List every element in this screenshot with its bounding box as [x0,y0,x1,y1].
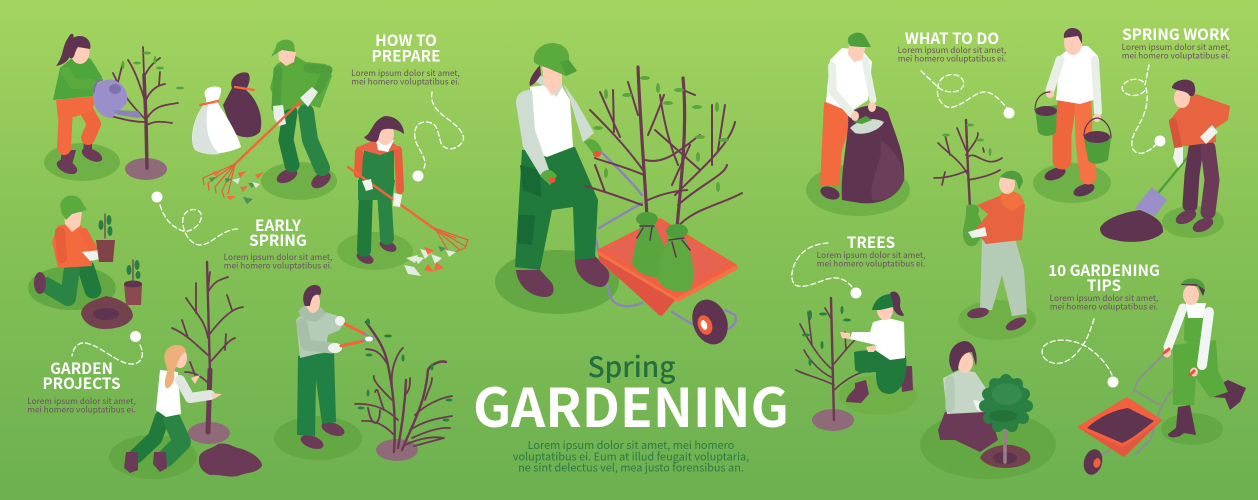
soil mound [199,443,262,477]
tree: young watered tree [110,47,184,168]
icon: soil hole [81,296,133,329]
tree: young leafy tree [796,298,870,420]
text block: spring work: mei homero voluptatibus ei. [1122,50,1230,62]
root bag left [632,222,666,277]
text block: garden projects: PROJECTS [42,372,121,394]
scene: woman raking leaves [337,116,468,276]
scene: woman watering young tree [44,34,184,181]
text block: how to prepare: mei homero voluptatibus ei. [351,76,460,88]
text block: spring work: SPRING WORK [1122,23,1230,45]
icon: garden rake [203,102,300,204]
icon: topiary [979,374,1033,432]
title: spring gardening: Spring [588,346,675,386]
scene: central woman pushing wheelbarrow with trees [495,43,742,349]
text block: trees: TREES [847,231,895,253]
soil mound [1100,210,1163,242]
text block: what to do [898,27,1006,65]
scene: man digging with shovel [1100,80,1230,242]
connector: spring work [1122,65,1166,153]
wheelbarrow tray [597,218,738,316]
tree: tall bare tree [172,262,243,432]
text block: 10 gardening tips: TIPS [1087,274,1121,296]
icon: pruned bush [355,318,452,452]
text block: garden projects [27,357,136,416]
scene: person in orange hoodie carrying tree [934,120,1036,340]
tree: sapling with root bag [934,120,1002,246]
icon: white garden bag [192,86,241,154]
text block: early spring: SPRING [249,229,307,251]
connector: 10 gardening tips [1042,319,1118,388]
icon: bucket left [1035,92,1057,136]
icon: watering can [93,80,142,118]
scene: blonde woman kneeling by tree [109,262,262,479]
root bag right [657,236,693,292]
text block: 10 gardening tips: Lorem ipsum dolor sit amet, [1050,292,1158,304]
text block: early spring: Lorem ipsum dolor sit amet, [224,251,332,263]
mound [980,445,1030,468]
connector: early spring [152,192,240,245]
text block: main description [513,437,749,476]
trees in wheelbarrow [585,67,742,228]
text block: what to do: Lorem ipsum dolor sit amet, [898,44,1006,56]
text block: 10 gardening tips [1048,259,1160,313]
connector: how to prepare [412,92,464,182]
scene: man kneeling with seedling pots [28,196,142,329]
text block: how to prepare: HOW TO [375,29,437,51]
barrow tray [1077,397,1162,457]
scene: woman planting topiary tree [920,341,1056,479]
icon: potted seedling in hands [96,214,115,262]
text block: what to do: WHAT TO DO [905,27,999,49]
text block: early spring [224,214,332,272]
text block: 10 gardening tips: 10 GARDENING [1048,259,1160,281]
connector: trees [792,243,862,298]
icon: pruning loppers [341,324,374,346]
text block: early spring: EARLY [255,214,301,236]
icon: rake with leaves [348,167,468,276]
text block: garden projects: GARDEN [50,357,113,379]
text block: trees [817,231,925,270]
scene: man pushing soil wheelbarrow [1077,278,1246,477]
scene: man pruning bush [274,285,452,461]
text block: main description: voluptatibus ei. Eum at illud feugait voluptaria, [513,448,749,464]
barrow handles [1092,355,1192,460]
text block: garden projects: Lorem ipsum dolor sit amet, [27,395,136,407]
text block: early spring: mei homero voluptatibus ei. [224,260,332,272]
icon: dark garden bag [223,72,261,137]
scene: woman with garden waste bag [806,33,910,216]
text block: how to prepare: PREPARE [371,44,441,66]
scene: man raking near garden bags [192,40,337,204]
scene: man carrying two buckets [1033,28,1111,203]
text block: garden projects: mei homero voluptatibus ei. [27,404,136,416]
text block: trees: Lorem ipsum dolor sit amet, [817,249,925,261]
title: spring gardening: GARDENING [473,366,789,443]
scene: woman inspecting tree [796,291,917,431]
text block: spring work: Lorem ipsum dolor sit amet, [1122,41,1230,53]
icon: shovel [1135,142,1200,216]
text block: spring work [1122,23,1230,62]
icon: barrow wheel [1081,447,1105,477]
connector: garden projects [72,331,142,364]
text block: trees: mei homero voluptatibus ei. [817,258,925,270]
connector: what to do [921,71,1014,118]
text block: how to prepare: Lorem ipsum dolor sit amet, [351,67,460,79]
wheelbarrow wheel [686,295,734,349]
text block: main description: Lorem ipsum dolor sit amet, mei homero [528,437,735,453]
icon: potted seedling on ground [124,260,142,305]
ground shadow [495,250,619,314]
icon: bucket right [1084,118,1111,164]
wheelbarrow frame [553,148,736,333]
text block: 10 gardening tips: mei homero voluptatibus ei. [1050,301,1158,313]
text block: how to prepare [351,29,460,88]
text block: main description: ne sint delectus vel, mea justo forensibus an. [518,460,744,476]
text block: what to do: mei homero voluptatibus ei. [898,53,1006,65]
